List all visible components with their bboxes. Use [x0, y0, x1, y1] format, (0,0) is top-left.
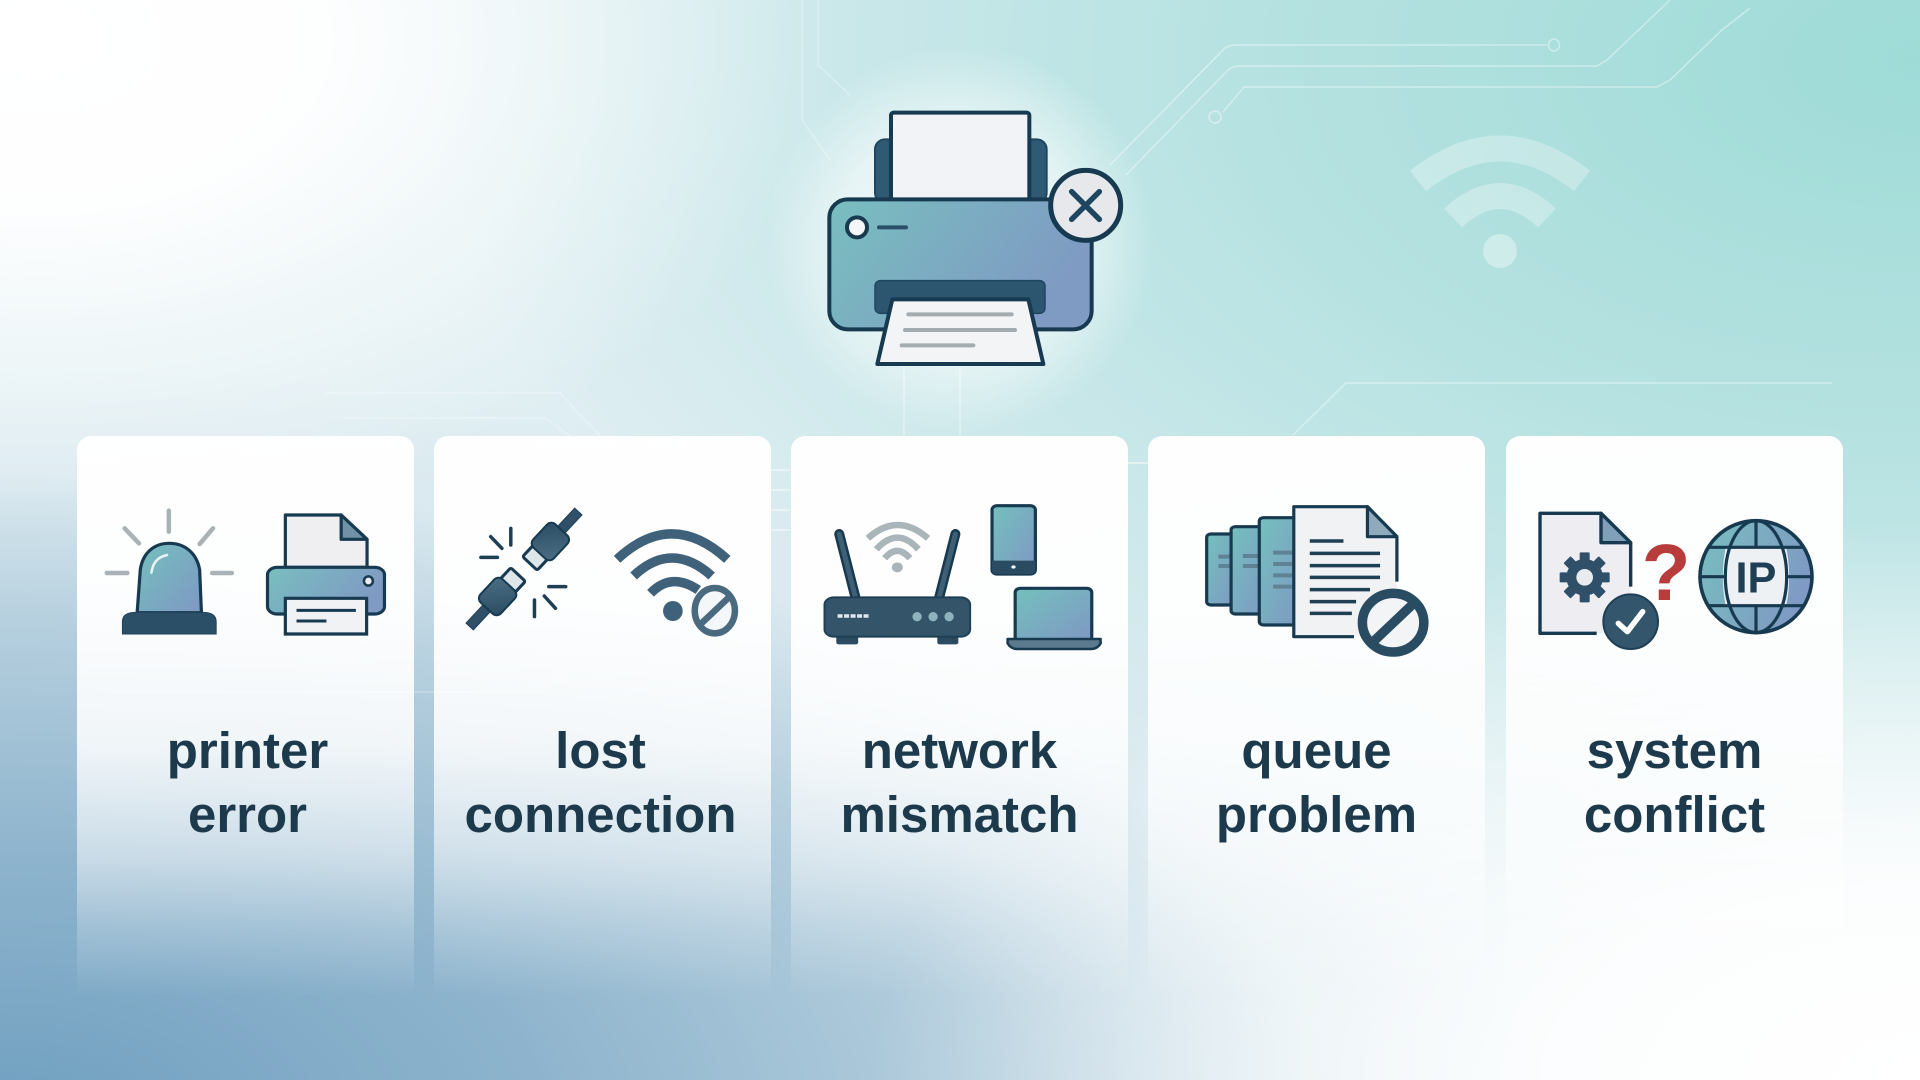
label: printer error: error — [188, 786, 307, 843]
label: system conflict: conflict — [1584, 786, 1765, 843]
icon: small printer — [268, 515, 384, 634]
icon: wifi blocked — [617, 534, 735, 633]
status line — [879, 225, 906, 229]
icon: IP globe: IP — [1736, 555, 1776, 603]
printer paper tray — [891, 113, 1029, 203]
icon: print queue documents — [1207, 507, 1397, 637]
icon: question mark: ? — [1642, 528, 1690, 617]
label: network mismatch: mismatch — [840, 786, 1079, 843]
panel: printer error — [77, 436, 414, 996]
panel: queue problem — [1148, 436, 1485, 996]
status light — [847, 217, 867, 237]
panel: network mismatch — [791, 436, 1128, 996]
label: network mismatch: network — [862, 722, 1057, 779]
icon: router — [825, 525, 970, 644]
label: printer error — [167, 722, 328, 843]
icon: smartphone — [992, 506, 1035, 574]
output page — [877, 299, 1043, 364]
icon: prohibition sign — [1362, 593, 1424, 652]
panel: system conflict — [1506, 436, 1843, 996]
label: lost connection: lost — [555, 722, 646, 779]
label: printer error: printer — [167, 722, 328, 779]
label: queue problem — [1216, 722, 1417, 843]
icon: IP globe — [1700, 521, 1812, 633]
gear — [1560, 552, 1610, 602]
printer body — [829, 199, 1092, 329]
label: system conflict — [1584, 722, 1765, 843]
label: queue problem: problem — [1216, 786, 1417, 843]
error badge — [1051, 170, 1121, 240]
label: lost connection — [464, 722, 736, 843]
icon: disconnected cable — [459, 502, 589, 636]
check badge — [1603, 594, 1658, 649]
label: system conflict: system — [1587, 722, 1762, 779]
page text lines — [902, 314, 1015, 345]
icon: settings file — [1540, 513, 1658, 649]
icon: alarm siren — [107, 511, 232, 634]
label: queue problem: queue — [1241, 722, 1392, 779]
label: network mismatch — [840, 722, 1079, 843]
icon: laptop — [1008, 588, 1101, 649]
panel: lost connection — [434, 436, 771, 996]
label: lost connection: connection — [464, 786, 736, 843]
output slot — [875, 281, 1045, 313]
